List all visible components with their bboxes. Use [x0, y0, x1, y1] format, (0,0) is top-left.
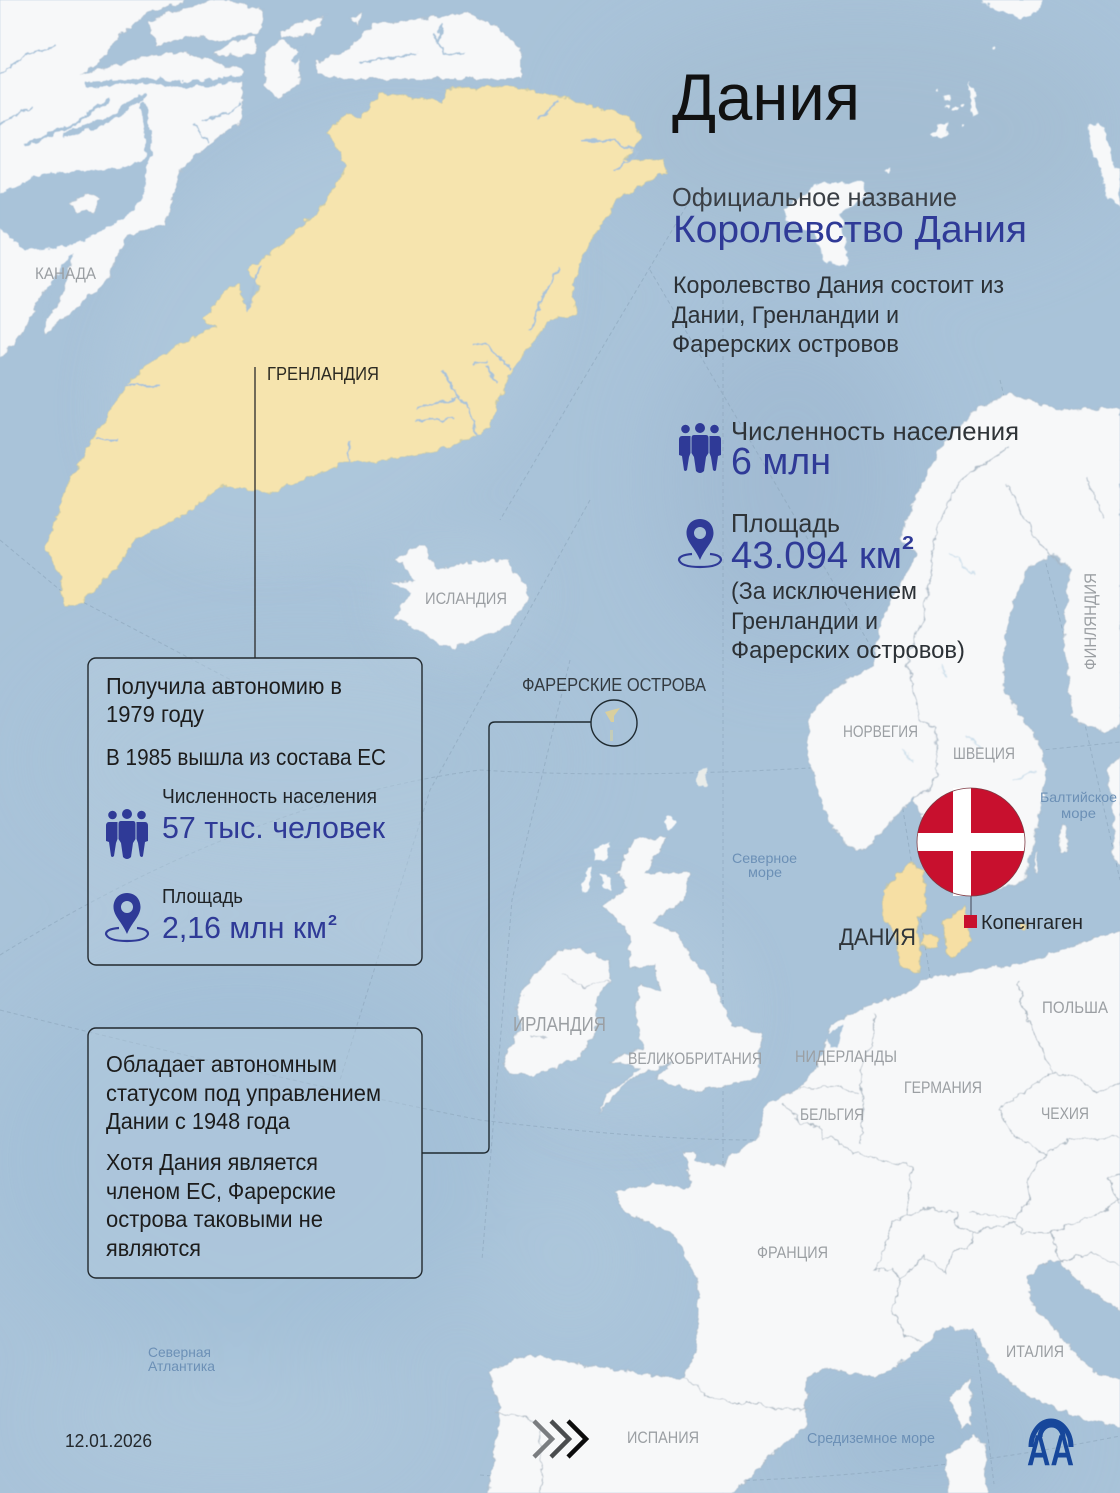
autonomy text [106, 673, 386, 770]
icon: AA logo: AA [1027, 1426, 1074, 1475]
official name value: Королевство Дания [673, 209, 1027, 251]
Faroe status text: Обладает автономным [106, 1051, 337, 1077]
area note: (За исключением [731, 578, 917, 605]
Greenland leader line [254, 367, 256, 658]
title: Дания [672, 60, 860, 134]
area note: Фарерских островов) [731, 637, 965, 664]
sea labels: море [1061, 805, 1096, 821]
Copenhagen label: Копенгаген [981, 912, 1083, 934]
area stat [679, 508, 965, 664]
icon: people [679, 423, 721, 473]
Faroe EU text: острова таковыми не [106, 1206, 323, 1232]
Denmark land [883, 862, 1027, 973]
sea labels: Средиземное море [807, 1430, 935, 1447]
country labels: ИСПАНИЯ [627, 1428, 699, 1447]
panel: Greenland [88, 658, 422, 965]
sea labels: море [748, 864, 782, 880]
Faroe status text: статусом под управлением [106, 1080, 381, 1106]
country labels: ГЕРМАНИЯ [904, 1078, 982, 1097]
Faroe status text [106, 1051, 381, 1134]
sea labels: Балтийское [1040, 789, 1117, 805]
Copenhagen marker [964, 896, 1083, 934]
Scottish isles [582, 768, 707, 892]
country labels: ФРАНЦИЯ [757, 1243, 828, 1262]
Faroe EU text: являются [106, 1235, 201, 1261]
Faroe Islands callout [422, 675, 706, 1153]
autonomy text: В 1985 вышла из состава ЕС [106, 744, 386, 770]
sea labels [148, 789, 1117, 1447]
description text: Фарерских островов [672, 331, 899, 358]
country labels: БЕЛЬГИЯ [800, 1105, 864, 1124]
date: 12.01.2026 [65, 1431, 152, 1451]
Faroe leader line [422, 722, 591, 1153]
description text [672, 272, 1004, 358]
Faroe Islands name: ФАРЕРСКИЕ ОСТРОВА [522, 675, 706, 695]
population caption: Численность населения [731, 416, 1019, 446]
Greenland population value: 57 тыс. человек [162, 810, 385, 845]
Greenland land [46, 87, 666, 605]
Faroe Islands marker circle [591, 700, 637, 746]
icon: map pin [679, 519, 721, 567]
Ireland land [502, 949, 611, 1077]
area note [731, 578, 965, 664]
area caption: Площадь [731, 508, 840, 538]
country labels [35, 264, 1109, 1447]
Great Britain land [598, 837, 762, 1113]
description text: Дании, Гренландии и [672, 302, 899, 329]
area note: Гренландии и [731, 608, 878, 635]
country labels: ИСЛАНДИЯ [425, 589, 507, 608]
icon: people [106, 809, 148, 859]
small northern islands [783, 0, 1120, 267]
Canada land [0, 0, 520, 359]
Scandinavia land [807, 394, 1120, 890]
Faroe EU text: Хотя Дания является [106, 1149, 318, 1175]
Faroe status text: Дании с 1948 года [106, 1108, 290, 1134]
Faroe EU text [106, 1149, 336, 1261]
Faroe EU text: членом ЕС, Фарерские [106, 1178, 336, 1204]
official name block [672, 182, 1027, 251]
Greenland area value: 2,16 млн км [162, 910, 327, 945]
country labels: НОРВЕГИЯ [843, 722, 918, 741]
country labels: ИРЛАНДИЯ [513, 1014, 606, 1036]
country labels: НИДЕРЛАНДЫ [795, 1047, 897, 1066]
icon: chevrons [534, 1421, 586, 1457]
area value: 43.094 км [731, 535, 902, 577]
autonomy text: 1979 году [106, 701, 204, 727]
icon: map pin [106, 893, 148, 941]
description text: Королевство Дания состоит из [673, 272, 1004, 299]
Greenland area caption: Площадь [162, 886, 243, 908]
country labels: ПОЛЬША [1042, 998, 1109, 1017]
icon: AA logo [1027, 1421, 1074, 1475]
sea labels: Атлантика [148, 1358, 215, 1374]
Europe land [488, 928, 1120, 1493]
icon: Danish flag [917, 788, 1025, 896]
panel: Faroe Islands [88, 1028, 422, 1278]
Iceland land [390, 543, 531, 649]
population value: 6 млн [731, 441, 831, 483]
Denmark label: ДАНИЯ [839, 924, 916, 951]
population stat [679, 416, 1019, 483]
country labels: ЧЕХИЯ [1041, 1104, 1089, 1123]
area value: 2 [902, 533, 914, 553]
official name caption: Официальное название [672, 182, 957, 212]
country labels: ИТАЛИЯ [1006, 1342, 1064, 1361]
Greenland population caption: Численность населения [162, 786, 377, 808]
sea labels: Северное [732, 850, 797, 866]
autonomy text: Получила автономию в [106, 673, 342, 699]
country labels: КАНАДА [35, 264, 97, 283]
country labels: ШВЕЦИЯ [953, 744, 1015, 763]
country labels: ФИНЛЯНДИЯ [1081, 573, 1100, 670]
sea labels: Северная [148, 1344, 211, 1360]
country labels: ВЕЛИКОБРИТАНИЯ [628, 1049, 762, 1068]
Greenland area value: 2 [328, 912, 337, 929]
Greenland label: ГРЕНЛАНДИЯ [267, 364, 379, 384]
